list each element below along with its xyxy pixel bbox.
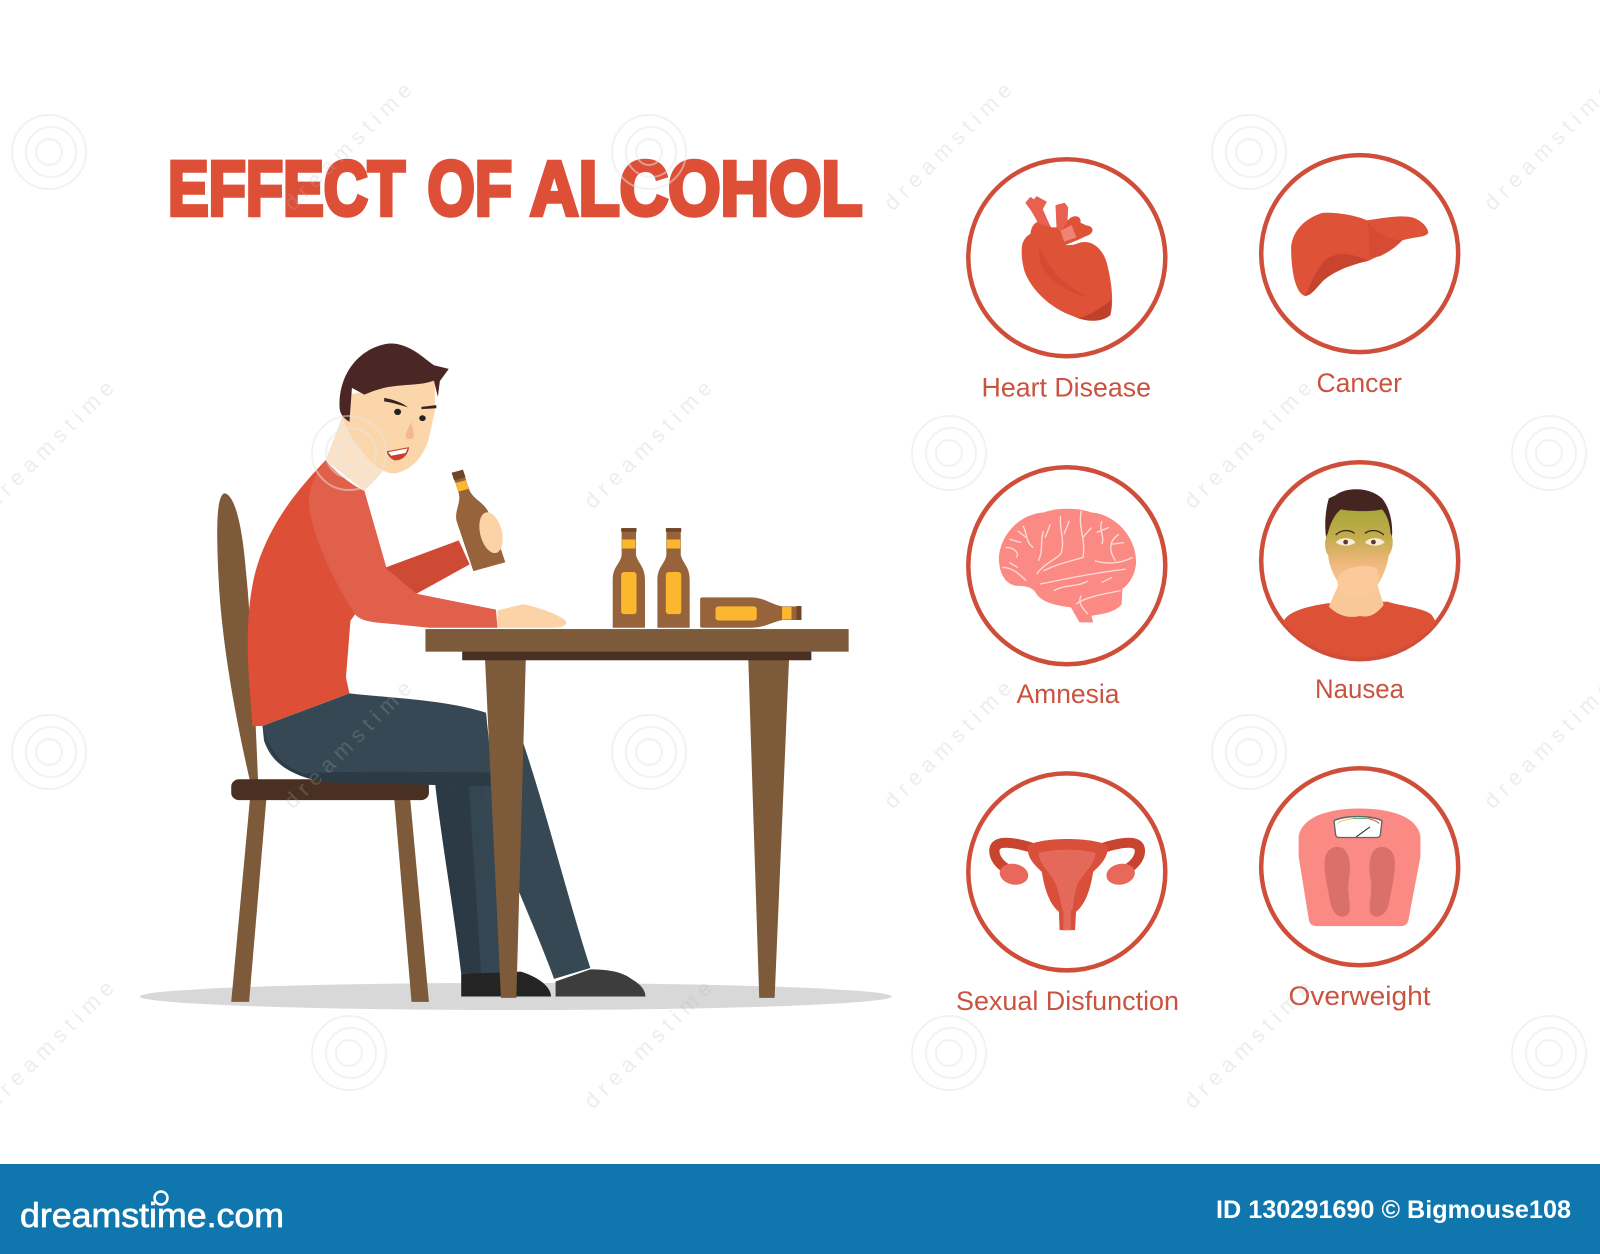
- watermark overlay: dreamstime: [1179, 376, 1317, 514]
- standing bottle 2: [657, 528, 690, 628]
- table: [425, 629, 849, 998]
- label: Cancer: [1316, 368, 1402, 398]
- hand on bottle: [476, 510, 506, 555]
- icon: brain: [999, 509, 1136, 622]
- item: Amnesia: [968, 467, 1165, 709]
- resting hand: [497, 604, 566, 628]
- watermark overlay: dreamstime: [279, 78, 417, 216]
- watermark overlay: dreamstime: [279, 676, 417, 814]
- circle: [1261, 155, 1458, 352]
- head: [339, 343, 449, 473]
- neck: [1329, 583, 1384, 617]
- hair: [1325, 489, 1392, 543]
- icon: bathroom scale: [1299, 809, 1420, 926]
- sweater: [248, 460, 387, 726]
- icon: uterus: [994, 839, 1140, 930]
- illustration: man drinking at table: [140, 343, 892, 1010]
- icon: liver: [1291, 213, 1428, 296]
- item: Sexual Disfunction: [956, 773, 1179, 1016]
- hand: [1337, 566, 1379, 598]
- trousers: [263, 693, 590, 979]
- label: Sexual Disfunction: [956, 986, 1179, 1016]
- item: Overweight: [1261, 768, 1458, 1011]
- watermark overlay: dreamstime: [579, 376, 717, 514]
- icon: heart: [1022, 196, 1112, 321]
- circle: [1261, 462, 1458, 659]
- chair: [217, 493, 429, 1002]
- far arm: [364, 540, 470, 596]
- watermark overlay: dreamstime: [879, 676, 1017, 814]
- logo spiral: [154, 1192, 168, 1204]
- title: EFFECT: [168, 146, 405, 232]
- circle: [1261, 768, 1458, 965]
- sleeve: [309, 461, 497, 628]
- standing bottle 1: [613, 528, 645, 628]
- footer band: [0, 1164, 1600, 1254]
- shoes: [461, 969, 645, 996]
- label: Nausea: [1315, 674, 1405, 704]
- circle: [968, 467, 1165, 664]
- shirt: [1284, 602, 1436, 657]
- watermark overlay: dreamstime: [879, 78, 1017, 216]
- label: Heart Disease: [982, 372, 1151, 402]
- icon: sick man: [1284, 489, 1437, 663]
- circle: [968, 159, 1165, 356]
- label: Overweight: [1288, 981, 1431, 1011]
- footer logo: dreamstime.com: [20, 1197, 284, 1235]
- watermark overlay: dreamstime: [1179, 976, 1317, 1114]
- item: Cancer: [1261, 155, 1458, 398]
- watermark overlay: dreamstime: [579, 976, 717, 1114]
- circle: [968, 773, 1165, 970]
- title: ALCOHOL: [530, 146, 862, 232]
- held bottle: [441, 467, 505, 571]
- item: Nausea: [1261, 462, 1458, 704]
- image credit: ID 130291690 © Bigmouse108: [1216, 1196, 1571, 1224]
- label: Amnesia: [1016, 679, 1120, 709]
- floor shadow: [140, 983, 892, 1010]
- face: [1325, 509, 1393, 588]
- neck: [326, 417, 387, 491]
- title: [168, 146, 862, 232]
- eyes: [1336, 531, 1385, 546]
- title: OF: [428, 146, 512, 232]
- lying bottle: [700, 597, 801, 628]
- item: Heart Disease: [968, 159, 1165, 402]
